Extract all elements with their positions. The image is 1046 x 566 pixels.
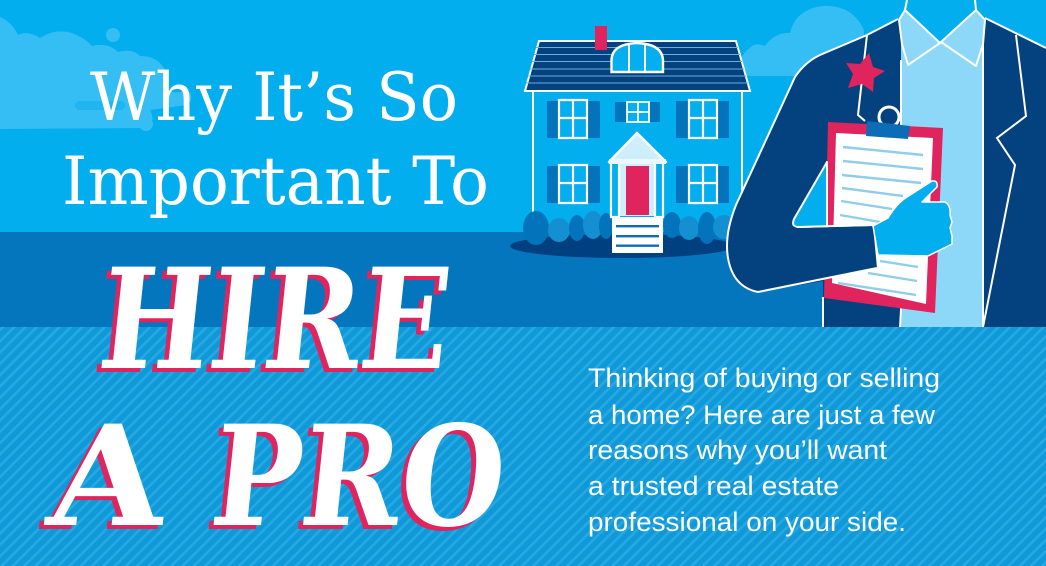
intro paragraph: professional on your side. xyxy=(588,507,906,537)
realtor figure xyxy=(727,0,1046,327)
intro paragraph: Thinking of buying or selling xyxy=(588,363,940,393)
arm opening xyxy=(793,162,827,227)
headline: a pro: A xyxy=(39,394,177,558)
headline: a pro: A xyxy=(34,398,172,562)
chimney xyxy=(595,26,607,50)
jacket outline xyxy=(727,19,898,292)
intro paragraph: a home? Here are just a few xyxy=(588,400,935,430)
jacket lapels xyxy=(858,35,1026,327)
cloud streak xyxy=(75,101,125,110)
house shadow xyxy=(510,234,734,258)
title: why it's so important to: Important To xyxy=(62,143,489,220)
right cloud xyxy=(740,6,864,76)
house xyxy=(510,26,750,258)
intro paragraph: reasons why you’ll want xyxy=(588,435,888,465)
striped foreground panel xyxy=(0,327,1046,566)
headline: a pro: PRO xyxy=(200,398,509,562)
intro paragraph xyxy=(588,363,940,537)
shirt xyxy=(901,20,983,327)
house walls xyxy=(533,91,742,215)
door xyxy=(626,166,649,215)
jacket xyxy=(727,18,1046,327)
porch steps xyxy=(612,217,663,253)
headline: a pro: PRO xyxy=(205,394,514,558)
middle ground band xyxy=(0,232,1046,328)
porch xyxy=(609,133,666,217)
headline: a pro xyxy=(34,394,514,562)
dormer window xyxy=(612,43,663,72)
headline: hire: HIRE xyxy=(93,237,459,401)
title: why it's so important to: Why It’s So xyxy=(90,59,458,136)
intro paragraph: a trusted real estate xyxy=(588,471,839,501)
title: why it's so important to xyxy=(62,59,489,220)
shutters xyxy=(547,101,729,203)
clipboard xyxy=(824,107,943,313)
hand thumbs up xyxy=(873,181,952,256)
shrubs xyxy=(523,211,735,245)
left cloud xyxy=(0,17,191,131)
roof xyxy=(525,41,750,91)
lapel pin star xyxy=(846,53,885,92)
sky background xyxy=(0,0,1046,233)
neck xyxy=(905,0,976,43)
shirt collar xyxy=(899,10,985,66)
headline: hire: HIRE xyxy=(88,241,454,405)
windows xyxy=(559,100,717,203)
sleeve xyxy=(728,210,877,292)
